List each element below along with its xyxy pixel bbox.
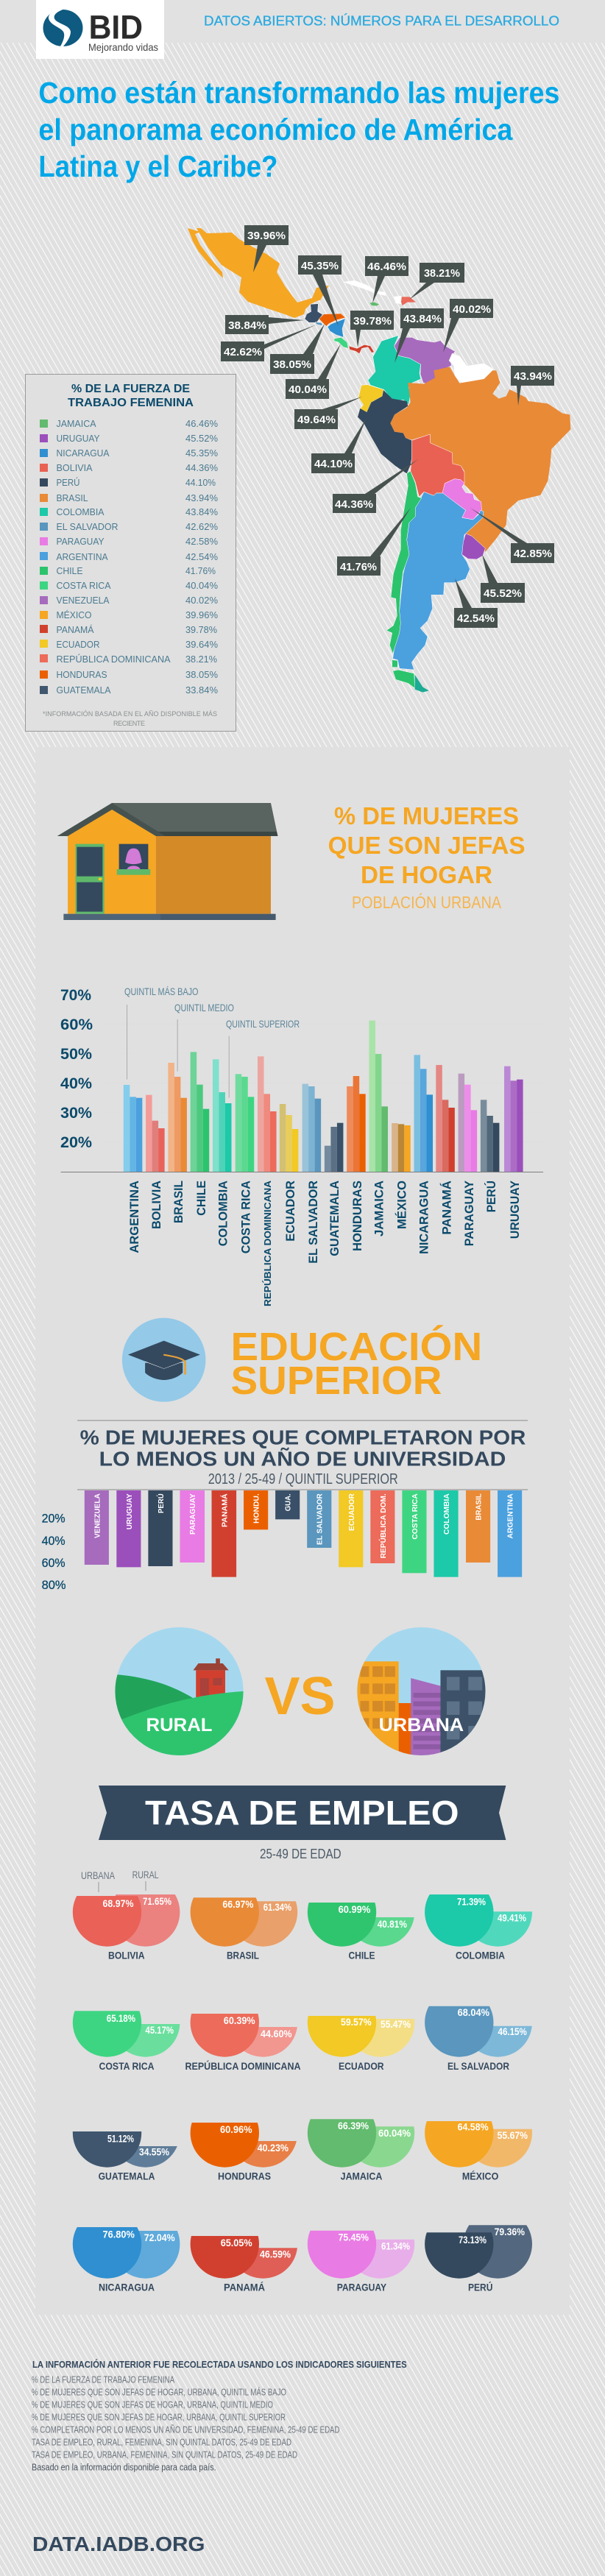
icon: rural landscape: RURAL (146, 1715, 212, 1735)
map: Mexico (188, 228, 329, 318)
legend country names (56, 418, 171, 696)
bowl chart: Guatemala: 51.12% (107, 2133, 134, 2145)
quintile labels: QUINTIL SUPERIOR (226, 1018, 300, 1030)
legend values: 40.02% (185, 595, 218, 606)
callout: Nicaragua (298, 255, 342, 326)
bowl chart: Costa Rica: 65.18% (107, 2012, 135, 2024)
bowl chart: Guatemala (73, 2098, 180, 2182)
icon: rural landscape (113, 1627, 245, 1757)
callout: Mexico (244, 225, 289, 272)
bar labels: COSTA RICA (411, 1493, 420, 1540)
x axis country labels: COLOMBIA (216, 1181, 230, 1246)
bowl chart: Brasil (191, 1878, 297, 1961)
VS label: VS (265, 1667, 336, 1726)
bar labels: PARAGUAY (188, 1493, 197, 1535)
bowl chart: Paraguay: PARAGUAY (337, 2282, 387, 2293)
axis labels: 20% (42, 1512, 66, 1526)
legend country names: VENEZUELA (56, 595, 110, 606)
legend country names: PANAMÁ (56, 624, 94, 635)
panel: main grey content (35, 747, 570, 2315)
legend: urban and rural labels (81, 1869, 159, 1892)
footer: indicators notes: % DE MUJERES QUE SON JEFAS DE HOGAR, URBANA, QUINTIL MÁS BAJO (32, 2387, 286, 2398)
callout: Costa Rica (286, 344, 341, 399)
bowl chart: Brasil: BRASIL (227, 1950, 259, 1961)
axis labels: 40% (42, 1534, 66, 1548)
bar chart: female household heads by quintile (60, 986, 543, 1306)
callout: Panama: 39.78% (353, 315, 392, 328)
x axis country labels (127, 1180, 522, 1306)
subheading: age range: 25-49 DE EDAD (260, 1847, 342, 1861)
callout: Argentina (454, 578, 498, 628)
legend country names: REPÚBLICA DOMINICANA (56, 654, 171, 665)
x axis country labels: GUATEMALA (328, 1181, 342, 1256)
legend: urban and rural labels: URBANA (81, 1869, 116, 1881)
bowl chart: Brasil: 61.34% (263, 1901, 291, 1913)
header tagline: DATOS ABIERTOS: NÚMEROS PARA EL DESARROLLO (204, 13, 559, 28)
legend values (185, 418, 218, 696)
x axis country labels: MÉXICO (395, 1181, 408, 1229)
bowl chart: Chile: 40.81% (378, 1918, 407, 1930)
bar labels: ARGENTINA (506, 1493, 515, 1539)
banner: employment rate: TASA DE EMPLEO (145, 1794, 459, 1832)
bowl chart: Chile: CHILE (349, 1950, 375, 1961)
callout: Jamaica (365, 256, 408, 303)
legend footnote: *INFORMACIÓN BASADA EN EL AÑO DISPONIBLE MÁS (43, 710, 217, 718)
callout: Guatemala: 38.84% (228, 319, 266, 332)
heading: women with university education: % DE MUJERES QUE COMPLETARON POR (80, 1426, 526, 1449)
legend values: 41.76% (185, 565, 216, 576)
bowl chart: Colombia: COLOMBIA (456, 1950, 505, 1961)
bowl chart: Nicaragua: 76.80% (103, 2229, 135, 2240)
bar labels: REPÚBLICA DOM. (378, 1493, 388, 1558)
callout: El Salvador: 42.62% (224, 346, 262, 358)
bowl chart: República Dominicana: REPÚBLICA DOMINICANA (185, 2059, 300, 2072)
logo: BID: BID (89, 9, 143, 46)
panel: legend of female labour force (25, 374, 236, 732)
legend country names: PARAGUAY (56, 536, 105, 547)
bar chart: university completion (42, 1489, 528, 1592)
heading: higher education: EDUCACIÓN (231, 1325, 482, 1369)
axis labels (42, 1512, 66, 1592)
bowl chart: Honduras: 60.96% (220, 2123, 252, 2135)
legend country names: GUATEMALA (56, 684, 111, 696)
bowl chart: Paraguay: 61.34% (381, 2240, 410, 2252)
x axis country labels: PERÚ (484, 1181, 498, 1212)
callout: Mexico: 39.96% (247, 230, 286, 242)
heading: women heads of household (328, 802, 526, 888)
subheading: year and age: 2013 / 25-49 / QUINTIL SUPERIOR (208, 1471, 398, 1487)
callout: El Salvador (221, 325, 316, 361)
axis labels: 80% (42, 1578, 66, 1592)
legend heading (68, 383, 194, 409)
callout: Paraguay (470, 508, 554, 563)
callout: Argentina: 42.54% (457, 612, 495, 625)
heading: women heads of household: QUE SON JEFAS (328, 832, 526, 859)
icon: BID emblem (43, 9, 82, 46)
legend country names: HONDURAS (56, 669, 107, 680)
bowl chart: El Salvador (425, 1988, 532, 2072)
y axis labels (60, 987, 93, 1151)
legend country names: ECUADOR (56, 639, 100, 650)
callout: Colombia (395, 308, 444, 363)
bowl chart: Jamaica: JAMAICA (341, 2170, 382, 2182)
legend country names: COLOMBIA (56, 506, 105, 517)
bar labels: GUA. (284, 1493, 293, 1511)
bar labels: HONDU. (252, 1493, 261, 1524)
title (38, 76, 559, 183)
title: Como están transformando las mujeres (38, 76, 559, 110)
map of Latin America (188, 228, 570, 693)
bowl chart: Paraguay (308, 2209, 414, 2293)
bowl chart: El Salvador: 68.04% (458, 2006, 490, 2018)
bowl chart: Jamaica: 60.04% (378, 2127, 411, 2139)
callout: Paraguay: 42.85% (514, 548, 552, 560)
x axis country labels: BOLIVIA (149, 1181, 163, 1229)
callout: Jamaica: 46.46% (367, 261, 406, 273)
legend values: 42.58% (185, 536, 218, 547)
bowl chart: Honduras: HONDURAS (218, 2170, 271, 2182)
map: South America (358, 353, 570, 693)
y axis labels: 40% (60, 1075, 92, 1092)
callout: Costa Rica: 40.04% (289, 383, 327, 396)
x axis country labels: REPÚBLICA DOMINICANA (262, 1180, 273, 1306)
icon: urban buildings (355, 1627, 487, 1757)
footer: indicators notes: LA INFORMACIÓN ANTERIOR FUE RECOLECTADA USANDO LOS INDICADORES SIGUIENTES (32, 2359, 407, 2370)
legend footnote (43, 710, 217, 727)
logo: BID (36, 0, 164, 59)
legend values: 39.96% (185, 609, 218, 620)
bar labels: EL SALVADOR (316, 1493, 325, 1545)
heading: women heads of household: DE HOGAR (361, 861, 492, 888)
legend country names: EL SALVADOR (56, 521, 118, 532)
callout: Bolivia: 44.36% (335, 498, 373, 511)
bowl chart: Ecuador (308, 1988, 414, 2072)
legend values: 45.35% (185, 447, 218, 459)
legend values: 42.62% (185, 521, 218, 532)
callout: Panama (350, 311, 394, 347)
logo: BID: Mejorando vidas (88, 41, 158, 53)
bowl chart: Chile (308, 1878, 414, 1961)
bowl chart: Jamaica (308, 2098, 414, 2182)
legend heading: TRABAJO FEMENINA (68, 397, 194, 409)
callout: Uruguay (481, 554, 525, 603)
x axis country labels: PANAMÁ (440, 1181, 453, 1235)
bowl chart: Nicaragua: NICARAGUA (99, 2282, 155, 2293)
bowl chart: Bolivia (73, 1878, 180, 1961)
bowl chart: Guatemala: 34.55% (139, 2146, 169, 2158)
bowl chart: México: 64.58% (458, 2121, 489, 2133)
bar labels: VENEZUELA (93, 1493, 102, 1538)
icon: urban buildings: URBANA (379, 1715, 464, 1735)
legend country names: COSTA RICA (56, 580, 111, 591)
icon: house with woman (57, 803, 277, 920)
legend values: 46.46% (185, 418, 218, 429)
callout: Dominican Republic (409, 263, 464, 300)
quintile labels (124, 986, 300, 1030)
bowl chart: Panamá: 65.05% (221, 2237, 252, 2248)
legend footnote: RECIENTE (113, 720, 145, 727)
legend values: 43.94% (185, 492, 218, 503)
x axis country labels: PARAGUAY (462, 1181, 476, 1246)
bowl chart: Bolivia: 71.65% (143, 1895, 171, 1907)
callout: Peru: 44.10% (314, 458, 353, 470)
y axis labels: 30% (60, 1105, 92, 1122)
heading: women with university education: LO MENOS UN AÑO DE UNIVERSIDAD (99, 1448, 506, 1471)
bowl chart: Bolivia: 68.97% (103, 1897, 134, 1909)
footer: indicators notes: % DE MUJERES QUE SON JEFAS DE HOGAR, URBANA, QUINTIL SUPERIOR (32, 2413, 286, 2423)
callout: Nicaragua: 45.35% (301, 260, 339, 272)
title: Latina y el Caribe? (38, 149, 277, 183)
legend values: 33.84% (185, 684, 218, 696)
map: Central America and north of South America (305, 297, 455, 405)
bowl chart: Perú (425, 2209, 532, 2293)
x axis country labels: ECUADOR (283, 1181, 297, 1242)
x axis country labels: JAMAICA (372, 1181, 386, 1236)
legend values: 38.21% (185, 654, 217, 665)
bowl chart: México: MÉXICO (462, 2170, 498, 2182)
bowl chart: Ecuador: 55.47% (381, 2018, 411, 2030)
axis labels: 60% (42, 1556, 66, 1570)
bowl chart: México (425, 2098, 532, 2182)
heading: women heads of household: % DE MUJERES (334, 802, 519, 829)
bowl chart: Bolivia: BOLIVIA (108, 1950, 145, 1961)
heading: higher education: SUPERIOR (231, 1359, 442, 1403)
callout: Brazil (511, 366, 554, 406)
callout: Ecuador (294, 397, 362, 429)
x axis country labels: ARGENTINA (127, 1181, 141, 1253)
callout: Venezuela: 40.02% (453, 303, 491, 316)
x axis country labels: BRASIL (171, 1181, 185, 1223)
bar labels: COLOMBIA (442, 1493, 451, 1535)
bowl chart: Jamaica: 66.39% (338, 2120, 369, 2131)
legend swatches (40, 420, 48, 694)
footer: indicators notes: Basado en la información disponible para cada país. (32, 2462, 216, 2473)
x axis country labels: COSTA RICA (238, 1181, 252, 1253)
callout: Honduras (270, 324, 325, 374)
bowl chart: Colombia: 49.41% (498, 1912, 526, 1924)
legend: urban and rural labels: RURAL (132, 1869, 159, 1880)
heading: higher education (231, 1325, 482, 1403)
x axis country labels: CHILE (194, 1181, 208, 1216)
bowl chart: Colombia (425, 1878, 532, 1961)
bowl chart: Guatemala: GUATEMALA (99, 2170, 155, 2182)
callout: Guatemala (225, 315, 304, 334)
bowl chart: Perú: PERÚ (468, 2281, 492, 2293)
footer: indicators notes (32, 2359, 407, 2473)
callout: Peru (311, 418, 367, 473)
bowl chart: Ecuador: 59.57% (341, 2016, 372, 2028)
legend values: 44.10% (185, 477, 216, 488)
bar labels: PANAMÁ (219, 1493, 229, 1527)
callout: Colombia: 43.84% (403, 313, 442, 325)
bowl chart: Costa Rica (73, 1988, 180, 2072)
bowl chart: Paraguay: 75.45% (339, 2232, 369, 2243)
quintile labels: QUINTIL MEDIO (174, 1002, 234, 1013)
footer: indicators notes: TASA DE EMPLEO, URBANA, FEMENINA, SIN QUINTAL DATOS, 25-49 DE EDAD (32, 2450, 297, 2460)
callout: Uruguay: 45.52% (484, 587, 522, 600)
y axis labels: 50% (60, 1046, 92, 1063)
bowl chart: Panamá (191, 2209, 297, 2293)
legend values: 45.52% (185, 433, 218, 444)
legend heading: % DE LA FUERZA DE (71, 383, 190, 395)
y axis labels: 70% (60, 987, 91, 1004)
bar labels: PERÚ (156, 1493, 166, 1513)
bar labels (93, 1493, 515, 1558)
bowl chart: Perú: 79.36% (495, 2226, 525, 2237)
callouts on the map (221, 225, 554, 628)
bowl chart: Nicaragua (73, 2209, 180, 2293)
callout: Ecuador: 49.64% (297, 414, 336, 426)
legend country names: MÉXICO (56, 609, 91, 620)
legend country names: URUGUAY (56, 433, 100, 444)
legend country names: BRASIL (56, 492, 88, 503)
subheading: urban population: POBLACIÓN URBANA (352, 893, 502, 912)
legend values: 40.04% (185, 580, 218, 591)
callout: Chile: 41.76% (340, 561, 377, 573)
callout: Dominican Republic: 38.21% (424, 267, 460, 280)
bowl chart: El Salvador: EL SALVADOR (447, 2060, 509, 2072)
legend country names: PERÚ (56, 477, 79, 488)
callout: Venezuela (443, 299, 493, 353)
callout: Brazil: 43.94% (514, 370, 552, 383)
footer: indicators notes: % DE LA FUERZA DE TRABAJO FEMENINA (32, 2375, 175, 2385)
legend country names: BOLIVIA (56, 462, 93, 473)
hanging bars (85, 1490, 522, 1577)
bar labels: URUGUAY (125, 1493, 134, 1529)
legend values: 43.84% (185, 506, 218, 517)
quintile labels: QUINTIL MÁS BAJO (124, 986, 199, 997)
legend values: 44.36% (185, 462, 218, 473)
legend country names: JAMAICA (56, 418, 96, 429)
bowl chart: Nicaragua: 72.04% (144, 2232, 175, 2243)
legend country names: CHILE (56, 565, 83, 576)
legend country names: ARGENTINA (56, 551, 108, 562)
banner: employment rate (99, 1786, 506, 1840)
y axis labels: 20% (60, 1134, 92, 1151)
bowl chart: El Salvador: 46.15% (498, 2025, 527, 2037)
bowl chart: República Dominicana (185, 1988, 300, 2072)
bowl chart: República Dominicana: 44.60% (261, 2028, 292, 2039)
bowl chart: Honduras (191, 2098, 297, 2182)
x axis country labels: URUGUAY (508, 1181, 522, 1239)
x axis country labels: NICARAGUA (417, 1181, 431, 1254)
heading: women with university education (80, 1426, 526, 1471)
bowl chart: Panamá: 46.59% (260, 2248, 291, 2260)
footer: indicators notes: TASA DE EMPLEO, RURAL, FEMENINA, SIN QUINTAL DATOS, 25-49 DE EDAD (32, 2438, 291, 2448)
x axis country labels: EL SALVADOR (306, 1181, 320, 1264)
bowl chart: Costa Rica: 45.17% (146, 2024, 174, 2036)
bar labels: ECUADOR (347, 1493, 356, 1531)
title: el panorama económico de América (38, 113, 513, 146)
legend values: 38.05% (185, 669, 218, 680)
callout: Bolivia (333, 459, 418, 513)
bowl chart: Ecuador: ECUADOR (339, 2060, 384, 2072)
footer: indicators notes: % COMPLETARON POR LO MENOS UN AÑO DE UNIVERSIDAD, FEMENINA, 25-49 DE EDAD (32, 2425, 340, 2435)
bowl chart: Brasil: 66.97% (222, 1898, 254, 1910)
map: Caribbean white islands (343, 280, 401, 304)
legend country names: NICARAGUA (56, 447, 110, 459)
icon: graduation cap (122, 1318, 205, 1402)
bowl chart: México: 55.67% (498, 2129, 528, 2141)
bars (61, 995, 543, 1172)
bowl chart: Colombia: 71.39% (457, 1896, 486, 1908)
legend values: 39.78% (185, 624, 217, 635)
bowl chart: Honduras: 40.23% (258, 2142, 289, 2154)
callout: Chile (337, 508, 411, 576)
footer: website: DATA.IADB.ORG (32, 2533, 205, 2555)
bowl chart: República Dominicana: 60.39% (224, 2014, 255, 2026)
legend values: 39.64% (185, 639, 218, 650)
bar labels: BRASIL (475, 1493, 484, 1521)
legend values: 42.54% (185, 551, 218, 562)
bowl chart: Costa Rica: COSTA RICA (99, 2060, 155, 2072)
bowl chart: Chile: 60.99% (339, 1903, 371, 1915)
x axis country labels: HONDURAS (350, 1181, 364, 1251)
callout: Honduras: 38.05% (273, 358, 311, 371)
y axis labels: 60% (60, 1016, 93, 1033)
bowl chart: Panamá: PANAMÁ (224, 2282, 265, 2293)
footer: indicators notes: % DE MUJERES QUE SON JEFAS DE HOGAR, URBANA, QUINTIL MEDIO (32, 2400, 273, 2410)
bowl chart: Perú: 73.13% (459, 2234, 487, 2246)
